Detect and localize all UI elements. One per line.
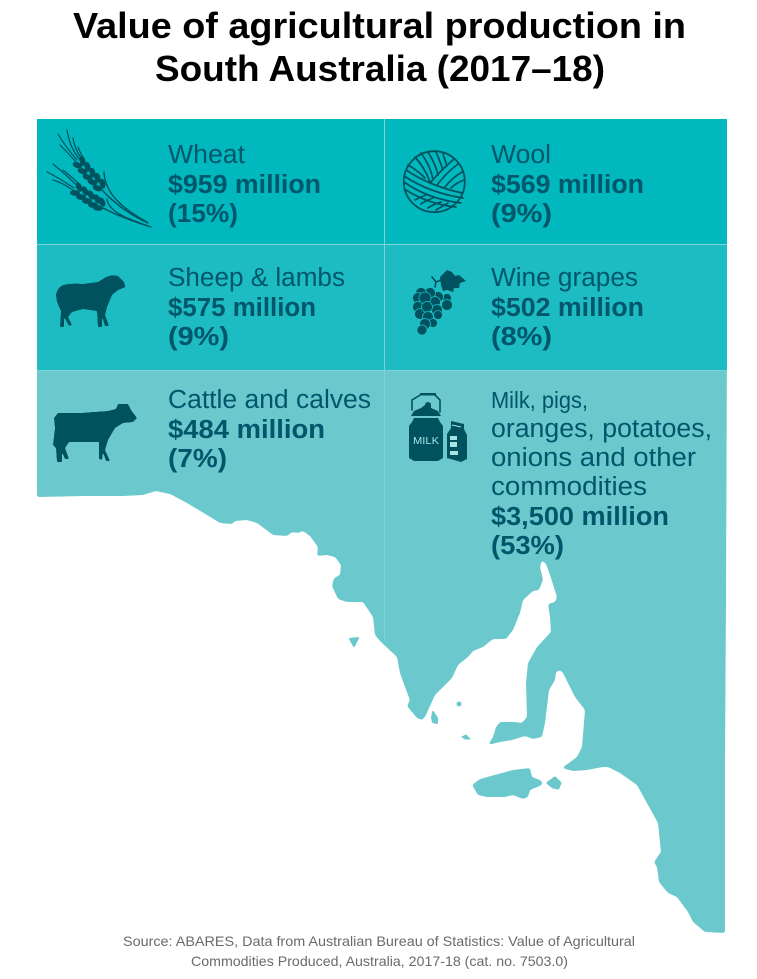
text: wool: $569 million: [491, 171, 644, 199]
text: wine grapes: Wine grapes: [491, 264, 638, 292]
text: wool: (9%): [491, 200, 552, 228]
source note: Commodities Produced, Australia, 2017-18 (cat. no. 7503.0): [191, 953, 568, 969]
source note: [123, 933, 635, 969]
title: South Australia (2017–18): [155, 48, 605, 89]
title: [73, 5, 686, 89]
source note: Source: ABARES, Data from Australian Bureau of Statistics: Value of Agricultural: [123, 933, 635, 949]
text: milk and other commodities: commodities: [491, 473, 647, 501]
text: milk and other commodities: Milk, pigs,: [491, 387, 588, 413]
text: wine grapes: (8%): [491, 323, 552, 351]
text: milk and other commodities: oranges, potatoes,: [491, 415, 712, 443]
map of South Australia: [37, 119, 727, 933]
island: gulf south: [462, 735, 470, 739]
panel: wheat: [47, 130, 321, 228]
panel: wine grapes: [412, 264, 644, 351]
icon: cow: [53, 404, 137, 462]
panel: cattle and calves: [53, 386, 371, 473]
icon: milk can and carton: [409, 393, 467, 462]
icon: sheep: [56, 275, 126, 327]
text: wine grapes: [491, 264, 644, 351]
grid lines: [37, 119, 727, 640]
panel: sheep and lambs: [56, 264, 345, 351]
text: wheat: [168, 141, 321, 228]
title: Value of agricultural production in: [73, 5, 686, 46]
text: wheat: $959 million: [168, 171, 321, 199]
map band: lower with coastline: [37, 340, 727, 933]
map band: middle: [37, 244, 727, 370]
icon: milk can and carton: MILK: [413, 436, 439, 447]
text: milk and other commodities: $3,500 million: [491, 503, 669, 531]
island: Kangaroo Island: [472, 768, 542, 799]
panel: wool: [404, 141, 644, 228]
text: milk and other commodities: onions and other: [491, 444, 697, 472]
text: sheep and lambs: $575 million: [168, 294, 316, 322]
text: sheep and lambs: Sheep & lambs: [168, 264, 345, 292]
panel: milk and other commodities: [409, 387, 712, 560]
text: wool: Wool: [491, 141, 551, 169]
island: dot: [456, 702, 462, 706]
island: small east: [548, 778, 560, 788]
text: cattle and calves: $484 million: [168, 416, 325, 444]
text: cattle and calves: Cattle and calves: [168, 386, 371, 414]
text: wheat: Wheat: [168, 141, 245, 169]
map band: top: [37, 119, 727, 244]
text: sheep and lambs: (9%): [168, 323, 229, 351]
text: wheat: (15%): [168, 200, 238, 228]
icon: grapes: [412, 270, 466, 335]
icon: ball of wool: [404, 151, 465, 212]
text: cattle and calves: [168, 386, 371, 473]
text: wine grapes: $502 million: [491, 294, 644, 322]
text: wool: [491, 141, 644, 228]
island: west coast: [350, 638, 358, 646]
text: sheep and lambs: [168, 264, 345, 351]
text: milk and other commodities: [491, 387, 712, 560]
island: gulf west: [432, 712, 437, 723]
icon: wheat: [47, 130, 151, 227]
wheat ears: [70, 155, 107, 211]
text: milk and other commodities: (53%): [491, 532, 564, 560]
text: cattle and calves: (7%): [168, 445, 227, 473]
